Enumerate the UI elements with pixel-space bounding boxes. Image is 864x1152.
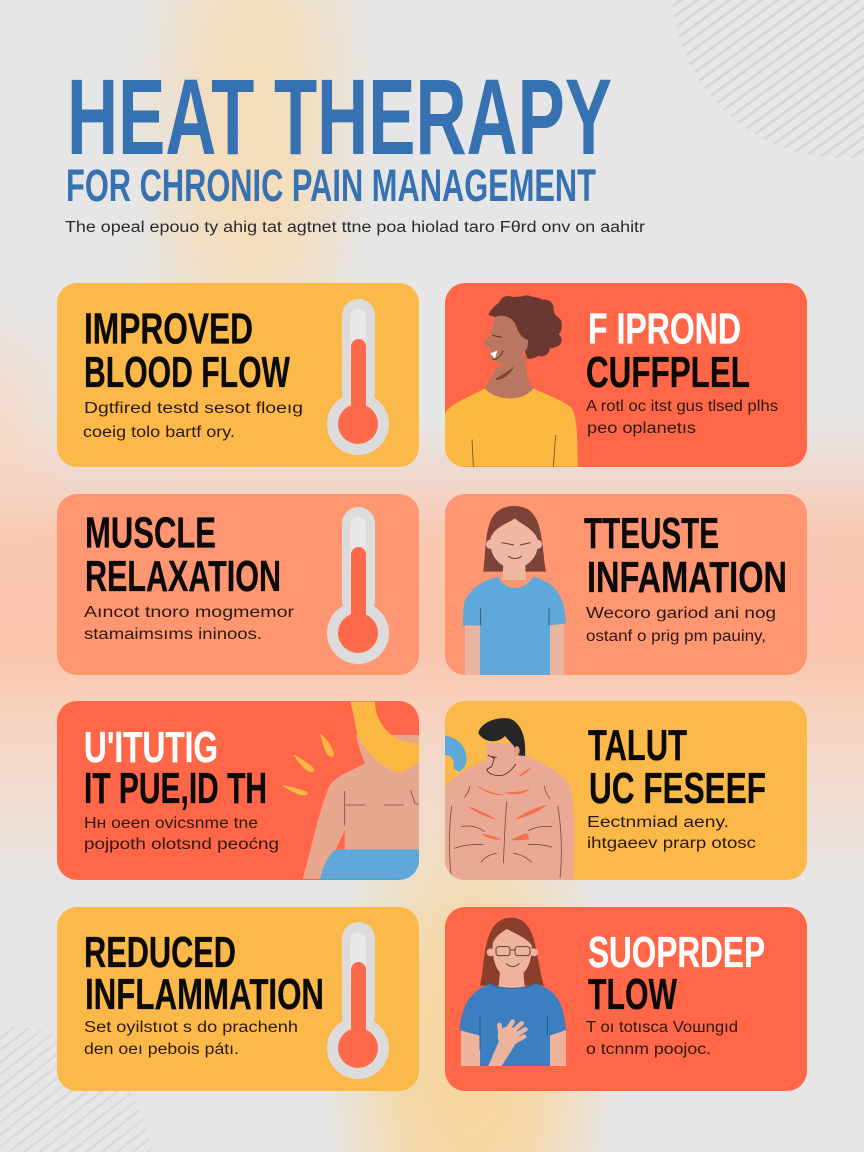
heading: F IPROND: [588, 304, 741, 354]
body text: Aıncot tnoro mogmemor: [84, 604, 294, 621]
heading: SUOPRDEP: [588, 928, 765, 977]
heading: U'ITUTIG: [84, 723, 218, 772]
illustration: smiling person: [445, 295, 578, 467]
body text: [586, 1019, 738, 1058]
heading: [584, 509, 787, 602]
heading: [588, 721, 766, 813]
heading: TLOW: [588, 970, 677, 1019]
heading: UC FESEEF: [589, 764, 766, 813]
body text: [586, 605, 776, 645]
panel: improved blood flow: [57, 283, 419, 467]
body text: [84, 604, 294, 643]
body text: pojpoth olotsnd peoćng: [84, 836, 279, 853]
illustration: woman with glasses, hand on chest: [459, 918, 566, 1066]
panel: supported flow: [445, 907, 807, 1091]
heading: MUSCLE: [85, 508, 216, 558]
decorative striped circle top right: [672, 0, 864, 158]
panel: tissue inflammation: [445, 494, 807, 675]
body text: o tcnnm poojoc.: [586, 1041, 711, 1058]
body text: Dgtfired testd sesot floeıg: [84, 400, 303, 417]
decorative striped circle bottom left: [0, 1027, 152, 1152]
panel: talut uc feseef: [445, 701, 807, 880]
panel: muscle relaxation: [57, 494, 419, 675]
body text: [84, 815, 279, 853]
heading: [84, 928, 324, 1019]
body text: stamaimsıms ininoos.: [84, 626, 262, 643]
heading: REDUCED: [84, 928, 236, 977]
panel: improved comfort: [445, 283, 807, 467]
heading: [586, 304, 750, 397]
body text: [586, 398, 778, 437]
icon: thermometer: [327, 299, 389, 455]
illustration: shoulder with pain rays: [282, 702, 419, 879]
card background: [445, 283, 807, 467]
illustration: person with eyes closed: [463, 506, 566, 675]
body text: ihtgaeev prarp otosc: [587, 835, 756, 852]
heading: INFAMATION: [587, 553, 787, 602]
body text: [84, 1019, 298, 1058]
panel: reduced inflammation: [57, 907, 419, 1091]
heading: [85, 508, 281, 601]
body text: Wecoro gariod ani nog: [586, 605, 776, 622]
body text: den oeı pebois pátı.: [84, 1041, 239, 1058]
body text: Set oyilstıot s do prachenh: [84, 1019, 298, 1036]
card background: [445, 907, 807, 1091]
heading: CUFFPLEL: [586, 348, 750, 397]
illustration: man with sore torso: [445, 718, 574, 880]
card background: [57, 283, 419, 467]
panel: utilizing heat: [57, 701, 419, 880]
icon: thermometer: [327, 922, 389, 1079]
card background: [57, 701, 419, 880]
heading: BLOOD FLOW: [84, 348, 290, 397]
card background: [57, 907, 419, 1091]
body text: coeig tolo bartf ory.: [83, 424, 235, 441]
body text: peo oplanetıs: [587, 420, 696, 437]
heading: [84, 723, 267, 813]
heading: [588, 928, 765, 1019]
body text: Hн oeen ovicsnme tne: [84, 815, 258, 832]
body text: [83, 400, 303, 441]
heading: IT PUE,ID TH: [84, 764, 267, 813]
card background: [445, 701, 807, 880]
heading: IMPROVED: [84, 304, 253, 354]
heading: RELAXATION: [85, 552, 281, 601]
intro text: The opeal epouo ty ahig tat agtnet ttne poa hiolad taro Fθrd onv on aahitr: [65, 219, 645, 236]
heading: TTEUSTE: [584, 509, 719, 558]
body text: A rotl oc itst gus tlsed plhs: [586, 398, 778, 415]
subtitle: FOR CHRONIC PAIN MANAGEMENT: [66, 160, 596, 211]
icon: thermometer: [327, 507, 389, 664]
body text: T oı totısca Voшngıd: [586, 1019, 738, 1036]
heading: [84, 304, 290, 397]
body text: Eectnmiad aeny.: [587, 814, 729, 831]
body text: [587, 814, 756, 852]
heading: TALUT: [588, 721, 687, 770]
card background: [57, 494, 419, 675]
card background: [445, 494, 807, 675]
heading: INFLAMMATION: [85, 970, 324, 1019]
body text: ostanf o prig pm pauiny,: [586, 628, 766, 645]
